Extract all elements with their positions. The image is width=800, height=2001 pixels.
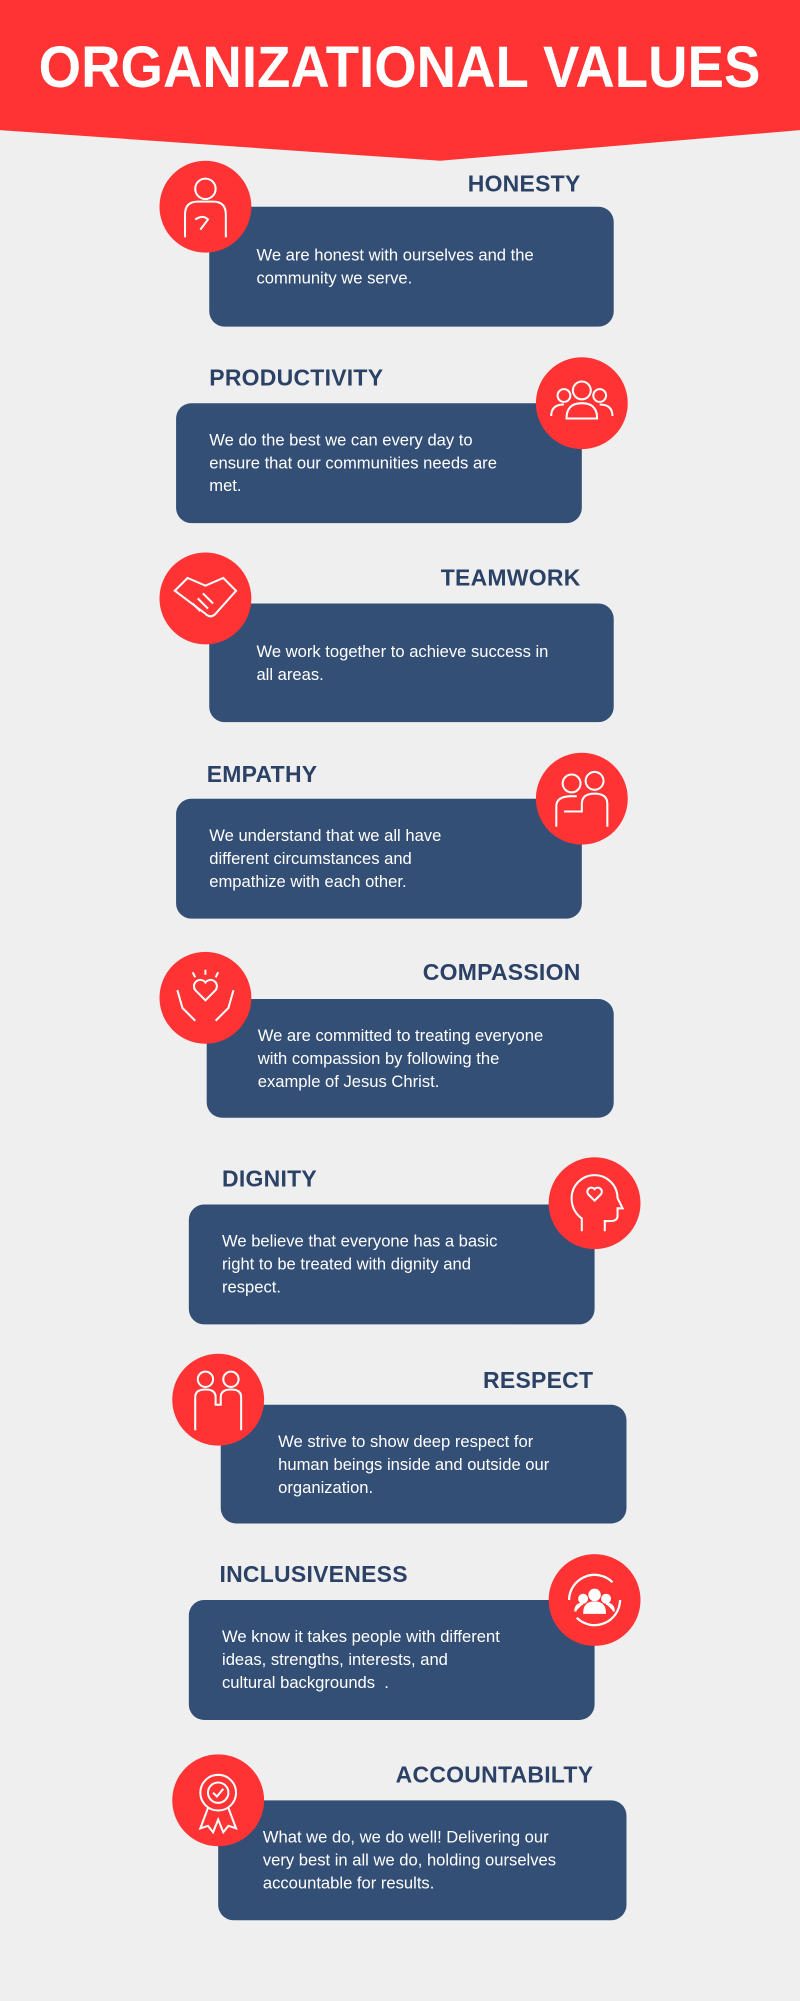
icon: person hand on heart [159,161,251,253]
compassion box [207,999,614,1118]
honesty box: We are honest with ourselves and the [256,245,534,264]
empathy box: We understand that we all have [209,826,441,845]
panel: inclusiveness [188,1554,640,1720]
honesty heading: HONESTY [468,171,581,196]
teamwork box [209,604,614,722]
accountability box: What we do, we do well! Delivering our [263,1827,549,1846]
icon: handshake [159,552,251,644]
respect box: organization. [278,1477,373,1496]
empathy heading: EMPATHY [207,762,317,787]
icon: award badge [172,1754,264,1846]
compassion box: with compassion by following the [258,1048,499,1067]
dignity box: We believe that everyone has a basic [222,1231,497,1250]
title: ORGANIZATIONAL VALUES [39,33,761,100]
panel: productivity [176,357,628,524]
respect box: human beings inside and outside our [278,1454,549,1473]
icon: two people [172,1354,264,1446]
accountability box [218,1800,626,1920]
empathy box: different circumstances and [209,848,412,868]
teamwork heading: TEAMWORK [441,565,581,591]
inclusiveness box: We know it takes people with different [222,1627,500,1646]
teamwork box: all areas. [256,664,324,683]
compassion box: We are committed to treating everyone [258,1025,543,1044]
icon: group of people [536,357,628,449]
icon: hands with heart [159,952,251,1044]
inclusiveness box [189,1600,595,1720]
empathy box: empathize with each other. [209,871,407,891]
panel: respect [172,1354,626,1524]
panel: honesty [160,160,614,327]
icon: people in cycle [549,1554,641,1646]
compassion heading: COMPASSION [423,959,581,985]
respect heading: RESPECT [483,1368,593,1393]
accountability heading: ACCOUNTABILTY [396,1762,593,1788]
productivity box: ensure that our communities needs are [209,453,497,472]
respect box [221,1405,626,1523]
icon: hug [536,753,628,845]
honesty box [209,207,614,327]
productivity box: met. [209,476,242,495]
panel: accountability [172,1754,626,1920]
dignity box: right to be treated with dignity and [222,1254,471,1273]
productivity box [176,403,582,523]
header banner [0,0,800,161]
compassion box: example of Jesus Christ. [258,1071,439,1090]
icon: head with heart [549,1157,641,1249]
dignity box: respect. [222,1277,281,1296]
inclusiveness box: ideas, strengths, interests, and [222,1650,448,1669]
panel: empathy [176,752,628,919]
inclusiveness box: cultural backgrounds . [222,1673,389,1692]
productivity heading: PRODUCTIVITY [209,365,383,390]
accountability box: very best in all we do, holding ourselves [263,1850,556,1869]
panel: dignity [188,1157,640,1324]
dignity heading: DIGNITY [222,1166,317,1192]
empathy box [176,799,582,919]
panel: teamwork [160,552,614,722]
honesty box: community we serve. [256,268,412,287]
panel: compassion [160,952,614,1118]
inclusiveness heading: INCLUSIVENESS [219,1562,408,1587]
productivity box: We do the best we can every day to [209,430,473,449]
teamwork box: We work together to achieve success in [256,641,548,660]
dignity box [189,1204,595,1324]
accountability box: accountable for results. [263,1873,434,1892]
respect box: We strive to show deep respect for [278,1431,533,1450]
